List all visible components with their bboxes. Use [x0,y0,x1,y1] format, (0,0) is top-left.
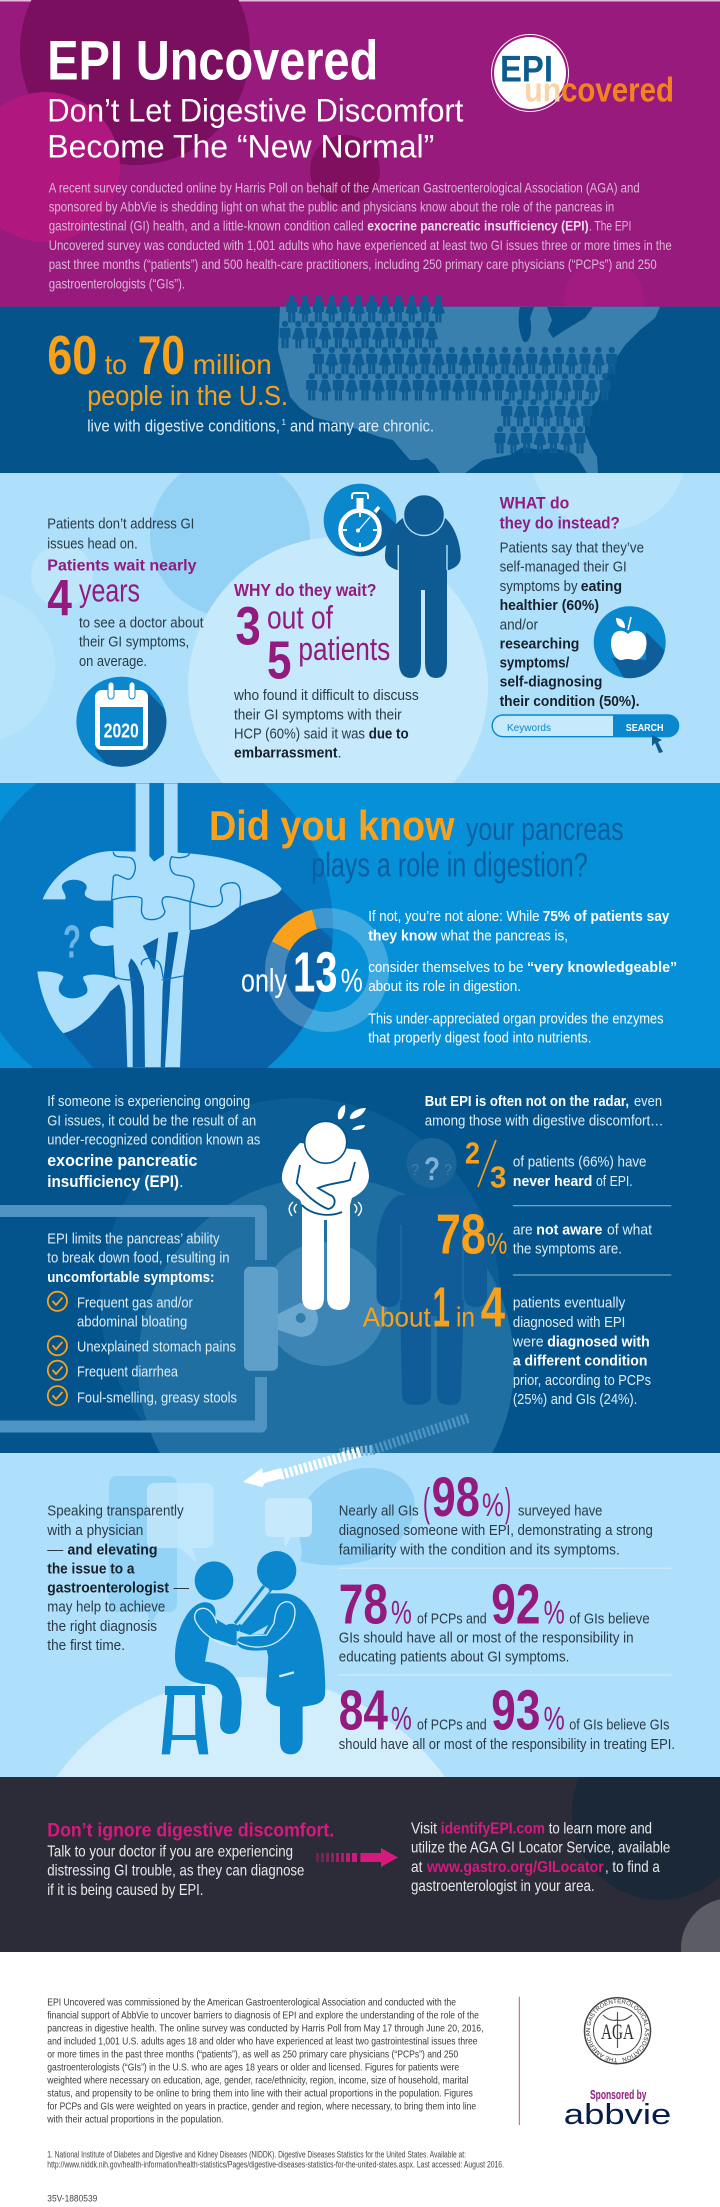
stat: 84% and 93%: should have all or most of the responsibility in treating EPI. [339,1736,675,1753]
stat: two thirds: of EPI. [596,1173,633,1190]
stat: two thirds [465,1135,646,1194]
text: survey methodology: for PCPs and GIs were weighted on years in practice, gender and region, where necessary, to bring them into line [47,2101,476,2113]
panel: what is EPI [0,1068,720,1453]
subtitle: Don’t Let Digestive Discomfort [47,93,463,129]
panel: physicians [0,1413,720,1777]
text: don't ignore: Don’t ignore digestive discomfort. [47,1820,334,1842]
text: don't ignore: Talk to your doctor if you are experiencing [47,1844,293,1861]
text: pancreas knowledge [368,908,677,1047]
text: what do they do instead: they do instead? [500,514,620,532]
text: why do they wait: . [338,745,342,762]
icon: stopwatch [324,484,396,556]
text: EPI explanation: . [179,1173,184,1191]
stat: 78% not aware: not aware [536,1221,602,1238]
stat: 84% and 93%: of PCPs and [417,1716,487,1733]
text: why do they wait: patients [298,631,390,667]
stat: 98% of GIs: familiarity with the condition and its symptoms. [339,1541,620,1558]
stat: about 1 in 4: a different condition [513,1353,647,1370]
text: pancreas knowledge: what the pancreas is, [440,927,568,944]
stat: about 1 in 4: (25%) and GIs (24%). [513,1391,637,1408]
text: visit identifyEPI: Visit [411,1820,437,1837]
stat: 84% and 93% [339,1678,675,1753]
stat: about 1 in 4: prior, according to PCPs [513,1372,651,1389]
text: patients wait nearly 4 years: on average. [79,653,147,670]
headline: did you know [209,802,624,885]
text: visit identifyEPI: at [411,1859,423,1876]
stat: about 1 in 4: About [363,1302,431,1333]
intro paragraph: exocrine pancreatic insufficiency (EPI) [367,218,589,234]
stat: two thirds: 3 [490,1159,506,1194]
text: patients wait nearly 4 years: to see a doctor about [79,614,204,631]
headline: 60 to 70 million: 70 [138,324,185,386]
text: patients wait nearly 4 years: 4 [47,569,73,626]
illustration: background person with question marks: ? [444,1162,452,1179]
headline: 60 to 70 million: million [193,349,272,380]
text: survey methodology: or more times in the past three months (“patients”), as well as 250 primary care physicians (“PCPs”) and 250 [47,2049,458,2061]
text: visit identifyEPI: , to find a [605,1859,660,1876]
donut chart: 13%: 13 [293,941,338,1005]
text: EPI explanation [47,1093,260,1286]
text: EPI explanation: exocrine pancreatic [47,1152,197,1170]
panel: header [0,0,720,340]
stat: 78% and 92%: of PCPs and [417,1610,487,1627]
text: why do they wait: out of [267,599,333,635]
text: patients wait nearly 4 years: their GI symptoms, [79,634,189,651]
text: what do they do instead: their condition (50%). [500,693,640,710]
text: survey methodology: weighted where necessary on education, age, gender, race/ethnicity, region, income, size of household, marital [46,2075,468,2087]
text: survey methodology: with their actual proportions in the population. [46,2114,224,2126]
stat: two thirds: 2 [465,1135,480,1170]
text: pancreas knowledge: they know [368,927,437,944]
text: document code: 35V-1880539 [47,2194,97,2205]
headline: 60 to 70 million: 60 [47,324,97,386]
intro paragraph: sponsored by AbbVie is shedding light on what the public and physicians know about the role of the pancreas in [49,199,614,215]
text: speaking transparently: the first time. [47,1637,125,1654]
logo: EPI uncovered [492,34,674,112]
panel: footer [46,1996,671,2205]
intro paragraph: gastroenterologists (“GIs”). [49,275,185,291]
text: why do they wait: 3 [236,596,261,656]
headline: 60 to 70 million [47,324,288,411]
text: why do they wait: due to [369,726,409,743]
illustration: doctor and patient [162,1551,325,1754]
checklist: symptoms: abdominal bloating [77,1314,187,1331]
text: survey methodology: financial support of AbbVie to uncover barriers to diagnosis of EPI and explore the understanding of the role of the [47,2010,479,2022]
text: what do they do instead: Patients say that they’ve [500,540,644,557]
text: survey methodology: pancreas in digestive health. The online survey was conducted by Harris Poll from May 17 through June 20, 2016, [47,2023,484,2035]
text: pancreas knowledge: 75% of patients say [543,908,670,925]
checklist: symptoms: Foul-smelling, greasy stools [77,1389,237,1406]
text: digestive conditions [87,418,434,436]
text: reference: http://www.niddk.nih.gov/health-information/health-statistics/Pages/digestive-diseases-statistics-for-the-united-states.aspx. Last accessed: August 2016. [47,2160,504,2170]
text: what do they do instead: and/or [500,616,538,633]
text: not on the radar: But EPI is often not on the radar, [425,1093,629,1110]
logo: EPI uncovered: EPI [500,49,553,90]
text: don't ignore: if it is being caused by EPI. [47,1882,203,1899]
intro paragraph [49,179,672,291]
text: don't ignore [47,1820,334,1899]
text: speaking transparently: and elevating [68,1541,158,1558]
text: EPI explanation: EPI limits the pancreas’ ability [47,1230,220,1247]
text: digestive conditions: and many are chronic. [290,418,434,436]
text: EPI explanation: uncomfortable symptoms: [47,1269,214,1286]
stat: 84% and 93%: 84 [339,1678,388,1742]
speech bubbles [109,1468,415,1626]
search bar: SEARCH [626,722,664,734]
text: digestive conditions: live with digestive conditions, [87,418,280,436]
stat: 78% not aware: the symptoms are. [513,1241,622,1258]
text: speaking transparently: may help to achieve [47,1599,165,1616]
illustration: person holding stomach [282,1105,369,1310]
text: digestive conditions: 1 [282,418,286,427]
stat: 84% and 93%: % [544,1700,565,1736]
icon: calendar: 2020 [104,720,139,742]
text: survey methodology: EPI Uncovered was commissioned by the American Gastroenterological Association and conducted with the [47,1997,456,2009]
text: visit identifyEPI: gastroenterologist in your area. [411,1878,595,1895]
text: survey methodology: and included 1,001 U.S. adults ages 18 and older who have experienced at least two gastrointestinal issues three [47,2036,478,2048]
logo: abbvie: abbvie [564,2099,671,2131]
stat: 98% of GIs [339,1465,653,1558]
stat: 84% and 93%: 93 [491,1678,540,1742]
text: what do they do instead: symptoms by [500,578,578,595]
text: why do they wait [233,580,419,762]
text: patients wait nearly 4 years: Patients don’t address GI [47,516,194,533]
checklist: symptoms: Frequent diarrhea [77,1364,179,1381]
stat: 78% and 92%: 92 [491,1572,540,1636]
illustration: background person with question marks: ? [411,1162,419,1179]
stat: about 1 in 4 [363,1276,651,1408]
stat: 78% and 92%: 78 [339,1572,388,1636]
text: pancreas knowledge: that properly digest food into nutrients. [368,1030,591,1047]
text: patients wait nearly 4 years [47,516,204,670]
title: EPI Uncovered [47,28,378,91]
stat: 78% not aware: of what [607,1221,653,1238]
text: pancreas knowledge: about its role in digestion. [368,978,521,995]
panel: call to action [0,1777,720,1952]
text: what do they do instead: eating [581,578,622,595]
text: why do they wait: embarrassment [234,745,338,762]
text: pancreas knowledge: “very knowledgeable” [527,959,677,976]
text: speaking transparently: the issue to a [47,1560,135,1577]
stat: 98% of GIs: ) [505,1481,511,1525]
text: speaking transparently: the right diagnosis [47,1618,157,1635]
stat: 78% not aware: 78 [436,1202,486,1266]
donut chart: 13% [241,918,379,1022]
text: patients wait nearly 4 years: years [79,573,140,609]
illustration: pipe and valve [0,1211,318,1426]
stat: about 1 in 4: in [456,1302,475,1333]
stat: 78% and 92%: of GIs believe [569,1610,650,1627]
text: EPI explanation: GI issues, it could be the result of an [47,1112,256,1129]
subtitle [47,93,463,165]
checklist: symptoms: Frequent gas and/or [77,1295,193,1312]
illustration: pancreas puzzle [37,783,282,1067]
logo: AGA seal: AGA [601,2019,634,2044]
text: pancreas knowledge: consider themselves to be [368,959,523,976]
people figures [280,295,617,454]
headline: 60 to 70 million: people in the U.S. [87,380,288,411]
text: what do they do instead: self-diagnosing [500,674,602,691]
map of the U.S. [278,307,660,473]
stat: about 1 in 4: patients eventually [513,1295,626,1312]
question mark: ? [63,916,81,968]
text: EPI explanation: If someone is experiencing ongoing [47,1093,250,1110]
text: speaking transparently: gastroenterologist [47,1580,169,1597]
text: don't ignore: distressing GI trouble, as they can diagnose [47,1863,304,1880]
text: speaking transparently: — [174,1580,189,1597]
headline: 60 to 70 million: to [105,349,127,380]
stat: about 1 in 4: were [512,1333,544,1350]
stat: 78% not aware: % [487,1227,507,1260]
donut chart: 13%: only [241,963,287,999]
text: speaking transparently: — [47,1541,63,1558]
stat: 78% and 92%: % [391,1594,412,1630]
stat: 78% not aware [436,1202,653,1266]
stat: 78% and 92%: % [544,1594,565,1630]
subtitle: Become The “New Normal” [47,129,434,165]
icon: calendar [76,676,166,767]
text: why do they wait: who found it difficult to discuss [233,687,419,704]
stat: 98% of GIs: diagnosed someone with EPI, demonstrating a strong [339,1522,653,1539]
stat: 98% of GIs: ( [423,1481,430,1525]
arrow: dashed pointing left [243,1418,468,1487]
illustration: background person with question marks [376,1138,487,1405]
headline: did you know: plays a role in digestion? [311,847,588,885]
text: patients wait nearly 4 years: Patients wait nearly [47,558,197,575]
stat: about 1 in 4: diagnosed with EPI [513,1314,625,1331]
stat: 78% not aware: are [513,1221,533,1238]
text: visit identifyEPI: to learn more and [549,1820,652,1837]
panel: patients wait [0,473,720,783]
search bar: Keywords [507,722,551,734]
panel: did you know [0,783,720,1068]
illustration: background person with question marks: ? [424,1151,440,1187]
donut chart: 13%: % [341,963,363,999]
text: reference [47,2150,504,2170]
text: not on the radar: even [634,1093,662,1110]
text: EPI explanation: insufficiency (EPI) [47,1173,179,1191]
text: reference: 1. National Institute of Diabetes and Digestive and Kidney Diseases (NIDDK). Digestive Diseases Statistics for the United States. Available at: [47,2150,466,2160]
text: survey methodology: gastroenterologists (“GIs”) in the U.S. who are ages 18 years or older and licensed. Figures for patients were [47,2062,459,2074]
stat: about 1 in 4: 4 [481,1276,505,1340]
stat: about 1 in 4: diagnosed with [547,1333,650,1350]
text: visit identifyEPI: utilize the AGA GI Locator Service, available [411,1840,670,1857]
stat: two thirds: never heard [513,1173,592,1190]
text: survey methodology [46,1997,483,2126]
logo: EPI uncovered: covered [561,72,674,110]
text: speaking transparently: with a physician [46,1522,143,1539]
stat: 98% of GIs: surveyed have [518,1503,602,1520]
stat: two thirds: of patients (66%) have [513,1154,646,1171]
text: speaking transparently: Speaking transparently [47,1503,184,1520]
intro paragraph: gastrointestinal (GI) health, and a little-known condition called [49,218,364,234]
intro paragraph: . The EPI [589,218,631,234]
checklist: symptoms: Unexplained stomach pains [77,1339,236,1356]
logo: AGA seal: THE AMERICAN GASTROENTEROLOGICAL ASSOCIATION [586,1999,650,2062]
arrow: pink [316,1848,398,1867]
text: what do they do instead: symptoms/ [500,655,570,672]
stat: 78% and 92% [339,1572,650,1666]
text: survey methodology: status, and propensity to be online to bring them into line with their actual proportions in the population. Figures [47,2088,473,2100]
text: why do they wait: HCP (60%) said it was [234,726,365,743]
text: EPI explanation: under-recognized condition known as [47,1132,260,1149]
text: what do they do instead [500,494,644,710]
text: what do they do instead: self-managed their GI [500,559,627,576]
text: speaking transparently [46,1503,189,1654]
text: why do they wait: 5 [267,630,292,690]
icon: standing person [385,494,461,678]
stat: 84% and 93%: of GIs believe GIs [569,1716,669,1733]
icon: apple [594,606,666,678]
text: pancreas knowledge: If not, you’re not alone: While [368,908,540,925]
stat: 98% of GIs: % [482,1487,504,1523]
headline: did you know: Did you know [209,802,455,849]
stat: 78% and 92%: educating patients about GI symptoms. [339,1649,569,1666]
stat: 98% of GIs: 98 [432,1465,480,1528]
text: sponsored by: Sponsored by [590,2087,647,2102]
text: EPI explanation: to break down food, resulting in [47,1250,230,1267]
text: patients wait nearly 4 years: issues head on. [47,535,138,552]
search bar [492,715,679,753]
text: why do they wait: WHY do they wait? [234,580,376,600]
text: what do they do instead: healthier (60%) [500,597,599,614]
logo: EPI uncovered: un [524,72,561,110]
text: visit identifyEPI: identifyEPI.com [441,1820,545,1837]
text: pancreas knowledge: This under-appreciated organ provides the enzymes [368,1011,664,1028]
text: why do they wait: their GI symptoms with their [234,706,402,723]
stat: 84% and 93%: % [391,1700,412,1736]
text: not on the radar [425,1093,664,1129]
text: visit identifyEPI: www.gastro.org/GILocator [426,1859,604,1876]
panel: 60 to 70 million [0,295,720,473]
stat: 78% and 92%: GIs should have all or most of the responsibility in [339,1630,634,1647]
text: not on the radar: among those with digestive discomfort… [425,1112,664,1129]
text: visit identifyEPI [411,1820,670,1895]
stat: about 1 in 4: 1 [432,1276,450,1340]
text: what do they do instead: researching [500,635,579,652]
stat: 98% of GIs: Nearly all GIs [339,1503,419,1520]
text: what do they do instead: WHAT do [500,494,569,512]
headline: did you know: your pancreas [466,811,624,847]
checklist: symptoms [48,1292,237,1406]
